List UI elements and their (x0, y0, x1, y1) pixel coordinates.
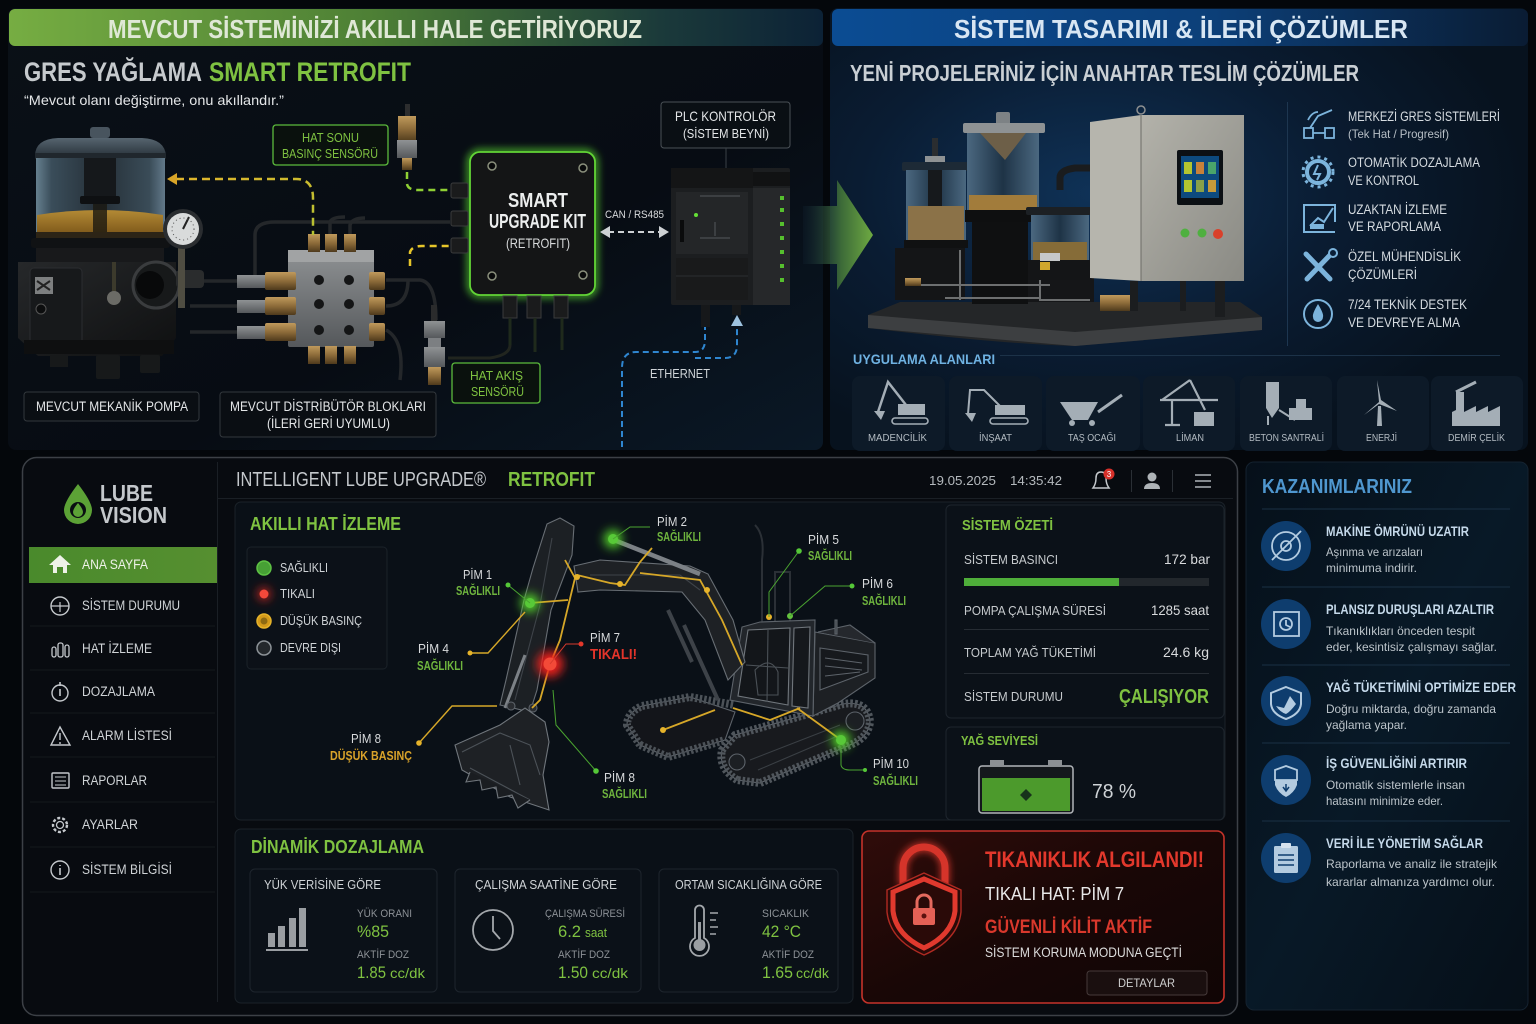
icon: distributor block (237, 234, 385, 364)
arrow: flow dashed line to kit (410, 246, 450, 266)
label: plc controller: PLC KONTROLÖR (675, 107, 776, 124)
benefit: grease consumption (1261, 676, 1516, 732)
panel: smart line monitoring: AKILLI HAT İZLEME (250, 514, 401, 534)
grease lines on excavator (530, 548, 841, 740)
top bar: INTELLIGENT LUBE UPGRADE® (236, 469, 486, 491)
application card: mining (852, 376, 945, 451)
pin 8 low pressure marker: PİM 8 (351, 732, 381, 746)
exhaust and rear mast (755, 525, 790, 622)
menu item: settings: AYARLAR (82, 817, 138, 832)
application card: construction (949, 376, 1042, 451)
icon: mechanical pump (18, 127, 204, 379)
feature: custom engineering (1306, 249, 1461, 282)
smart upgrade kit: (RETROFIT) (506, 235, 570, 251)
menu item: settings (53, 817, 138, 832)
pin markers (574, 574, 793, 733)
pin 6 marker: SAĞLIKLI (862, 593, 906, 608)
card: load: YÜK ORANI (357, 908, 412, 920)
pin 7 alarm marker: PİM 7 (590, 631, 620, 645)
panel: system summary: SİSTEM ÖZETİ (962, 517, 1053, 534)
feature: automatic dosing: VE KONTROL (1348, 173, 1419, 188)
stat: state: SİSTEM DURUMU (964, 689, 1063, 704)
benefit: work safety: İŞ GÜVENLİĞİNİ ARTIRIR (1326, 754, 1467, 771)
benefit: work safety: hatasını minimize eder. (1326, 794, 1443, 808)
benefit: unplanned downtime (1261, 599, 1497, 654)
pin 2 marker: SAĞLIKLI (657, 529, 701, 544)
pin 2 marker: PİM 2 (657, 515, 687, 529)
card: load: YÜK VERİSİNE GÖRE (264, 877, 381, 892)
menu item: system status (51, 597, 180, 615)
label: flow sensor connection (448, 345, 510, 358)
cabin (730, 620, 815, 716)
card: running hours (455, 869, 641, 992)
benefit: grease consumption: yağlama yapar. (1326, 718, 1407, 732)
card: load: %85 (357, 922, 389, 941)
card: ambient temperature: SICAKLIK (762, 908, 810, 920)
panel: dashboard (22, 458, 1238, 1016)
stat: state: ÇALIŞIYOR (1119, 686, 1209, 708)
application card: energy (1337, 376, 1429, 451)
label: flow sensor: HAT AKIŞ (470, 368, 523, 383)
feature: central grease systems: (Tek Hat / Progresif) (1348, 127, 1449, 141)
label: plc controller: (SİSTEM BEYNİ) (683, 126, 769, 141)
legend: SAĞLIKLI (280, 560, 328, 575)
stick (500, 518, 574, 712)
card: load (250, 869, 437, 992)
menu item: system info (51, 861, 172, 879)
icon: thermometer (690, 906, 718, 956)
menu item: line monitoring (52, 641, 152, 657)
panel: oil level: YAĞ SEVİYESİ (961, 733, 1038, 748)
arrow: can bus two-way (600, 226, 669, 238)
card: running hours: 1.50 (558, 963, 588, 982)
benefit: unplanned downtime: eder, kesintisiz çalışmayı sağlar. (1326, 640, 1497, 654)
panel: system design (803, 8, 1528, 451)
menu item: system info: SİSTEM BİLGİSİ (82, 862, 172, 877)
benefit: grease consumption: Doğru miktarda, doğru zamanda (1326, 702, 1496, 716)
label: plc controller (661, 102, 790, 148)
pin 5 marker: SAĞLIKLI (808, 548, 852, 563)
label: existing distributor blocks: (İLERİ GERİ UYUMLU) (267, 416, 390, 431)
benefit: data management: VERİ İLE YÖNETİM SAĞLAR (1326, 834, 1483, 851)
panel: smart retrofit (8, 8, 823, 450)
button: details: DETAYLAR (1118, 976, 1175, 990)
icon: bell: 3 (1107, 470, 1112, 479)
stat: consumption (964, 644, 1209, 660)
benefit: unplanned downtime: Tıkanıklıkları önceden tespit (1326, 624, 1476, 638)
stat: consumption: 24.6 kg (1163, 644, 1209, 660)
pin 4 marker (417, 612, 525, 673)
feature: technical support (1304, 297, 1467, 330)
label: line-end pressure sensor: BASINÇ SENSÖRÜ (282, 146, 378, 161)
header bar: system design: SİSTEM TASARIMI & İLERİ ÇÖZÜMLER (954, 14, 1408, 44)
button: details (1087, 971, 1207, 995)
benefit: data management (1261, 833, 1498, 889)
card: ambient temperature: ORTAM SICAKLIĞINA GÖRE (675, 877, 822, 892)
card: load: cc/dk (390, 965, 426, 981)
panel: dynamic dosing: DİNAMİK DOZAJLAMA (251, 837, 424, 857)
icon: line-end pressure sensor (397, 104, 417, 170)
panel: system summary (946, 505, 1224, 718)
card: running hours: ÇALIŞMA SAATİNE GÖRE (475, 877, 617, 892)
application card: steel: DEMİR ÇELİK (1448, 431, 1505, 444)
application card: construction: İNŞAAT (979, 431, 1013, 444)
menu item: alarm list: ALARM LİSTESİ (82, 728, 172, 743)
panel: benefits (1246, 462, 1528, 1010)
label: line-end pressure sensor (273, 125, 388, 165)
panel: blockage alarm: TIKALI HAT: PİM 7 (985, 884, 1124, 904)
application card: mining: MADENCİLİK (868, 431, 927, 444)
legend: DEVRE DIŞI (280, 641, 341, 655)
header bar: retrofit (9, 9, 823, 46)
label: existing pump (24, 392, 199, 421)
menu item: home (29, 547, 217, 583)
label: flow sensor: SENSÖRÜ (471, 384, 524, 399)
pin 1 marker: SAĞLIKLI (456, 583, 500, 598)
feature: technical support: VE DEVREYE ALMA (1348, 315, 1460, 330)
pin 4 marker: SAĞLIKLI (417, 658, 463, 673)
pin 8 healthy marker (553, 690, 647, 801)
label: flow sensor (452, 363, 540, 403)
benefit: work safety: Otomatik sistemlerle insan (1326, 778, 1465, 792)
stat: runtime: POMPA ÇALIŞMA SÜRESİ (964, 603, 1106, 618)
smart upgrade kit: UPGRADE KIT (489, 211, 586, 233)
feature: custom engineering: ÖZEL MÜHENDİSLİK (1348, 249, 1461, 264)
top bar: 14:35:42 (1010, 473, 1062, 488)
logo: LUBE (100, 480, 153, 506)
application card: steel (1431, 376, 1523, 451)
heading: gres yağlama smart retrofit: SMART RETROFIT (209, 57, 411, 87)
feature: central grease systems: MERKEZİ GRES SİSTEMLERİ (1348, 109, 1500, 124)
benefit: machine life: Aşınma ve arızaları (1326, 545, 1423, 559)
panel: blockage alarm: TIKANIKLIK ALGILANDI! (985, 847, 1204, 872)
application card: quarry (1046, 376, 1140, 451)
stat: consumption: TOPLAM YAĞ TÜKETİMİ (964, 645, 1096, 660)
tank centre (963, 112, 1045, 222)
quote: “Mevcut olanı değiştirme, onu akıllandır.” (24, 92, 284, 108)
feature: custom engineering: ÇÖZÜMLERİ (1348, 267, 1417, 282)
heading: application areas: UYGULAMA ALANLARI (853, 351, 995, 367)
pin 6 marker (790, 577, 906, 616)
benefit: work safety (1261, 754, 1467, 808)
smart upgrade kit: SMART (508, 190, 568, 212)
stat: runtime (964, 602, 1209, 618)
tank right (1026, 207, 1092, 280)
feature: technical support: 7/24 TEKNİK DESTEK (1348, 297, 1467, 312)
icon: bars (266, 908, 308, 951)
feature: automatic dosing (1303, 155, 1480, 188)
stat: pressure (964, 551, 1210, 586)
pin 7 alarm marker: TIKALI! (590, 646, 637, 663)
pin 10 marker: SAĞLIKLI (873, 773, 918, 788)
benefit: machine life: minimuma indirir. (1326, 561, 1417, 575)
sidebar (29, 462, 218, 1002)
heading: gres yağlama smart retrofit: GRES YAĞLAMA (24, 56, 202, 87)
panel: dynamic dosing (235, 829, 853, 1003)
menu item: dosing: DOZAJLAMA (82, 684, 155, 699)
panel: blockage alarm: GÜVENLİ KİLİT AKTİF (985, 917, 1152, 938)
menu item: reports (52, 773, 147, 788)
icon: user (1144, 472, 1160, 489)
icon: menu (1195, 475, 1211, 487)
label: existing pump: MEVCUT MEKANİK POMPA (36, 399, 188, 414)
card: ambient temperature: 1.65 (762, 963, 793, 982)
card: running hours: AKTİF DOZ (558, 948, 610, 961)
panel: blockage alarm (862, 831, 1224, 1003)
card: ambient temperature: cc/dk (796, 965, 830, 981)
feature: remote monitoring (1304, 202, 1447, 234)
icon: line flow sensor (424, 305, 445, 385)
pin 5 marker (769, 533, 852, 617)
pin 8 healthy marker: PİM 8 (604, 771, 635, 785)
heading: turnkey solutions: YENİ PROJELERİNİZ İÇİN ANAHTAR TESLİM ÇÖZÜMLER (850, 60, 1359, 86)
menu item: reports: RAPORLAR (82, 773, 147, 788)
legend: DÜŞÜK BASINÇ (280, 614, 362, 628)
bucket (455, 708, 549, 810)
pin 1 marker: PİM 1 (463, 568, 492, 582)
top bar: RETROFIT (508, 469, 595, 491)
arrow: pressure sensor dashed line (407, 172, 450, 190)
legend: TIKALI (280, 587, 315, 601)
arrow: level dashed line to pump (167, 173, 313, 235)
icon: plc device (671, 168, 790, 327)
menu item: home: ANA SAYFA (82, 557, 148, 572)
icon: bell (1093, 468, 1114, 488)
application card: port (1143, 376, 1235, 451)
card: ambient temperature: 42 °C (762, 922, 801, 941)
pin 10 marker: PİM 10 (873, 757, 909, 771)
feature: remote monitoring: VE RAPORLAMA (1348, 219, 1441, 234)
icon: clock (473, 910, 513, 950)
big arrow between panels (803, 180, 873, 290)
feature: automatic dosing: OTOMATİK DOZAJLAMA (1348, 155, 1480, 170)
top bar (218, 468, 1233, 499)
arrow: ethernet (622, 315, 743, 447)
tank left (902, 138, 968, 248)
label: ethernet: ETHERNET (650, 366, 710, 381)
pin 8 low pressure marker (330, 706, 497, 763)
pin 2 marker (604, 515, 701, 548)
panel: smart line monitoring (235, 502, 1225, 820)
panel: oil level: 78 % (1092, 781, 1136, 803)
label: existing distributor blocks: MEVCUT DİSTRİBÜTÖR BLOKLARI (230, 399, 426, 414)
icon: hoses (190, 217, 450, 380)
icon: shield lock (887, 847, 961, 955)
legend (247, 547, 387, 669)
benefit: unplanned downtime: PLANSIZ DURUŞLARI AZALTIR (1326, 601, 1494, 617)
pin 4 marker: PİM 4 (418, 642, 449, 656)
logo: VISION (100, 502, 167, 528)
benefit: data management: kararlar almanıza yardımcı olur. (1326, 875, 1495, 889)
label: line-end pressure sensor: HAT SONU (302, 130, 359, 145)
card: ambient temperature: AKTİF DOZ (762, 948, 814, 961)
logo (64, 480, 167, 528)
benefit: data management: Raporlama ve analiz ile stratejik (1326, 857, 1498, 871)
icon: skid machine (868, 106, 1262, 346)
excavator (455, 518, 875, 810)
card: load: 1.85 (357, 963, 386, 982)
body (813, 632, 875, 716)
menu item: system status: SİSTEM DURUMU (82, 598, 180, 613)
application card: concrete plant: BETON SANTRALİ (1249, 431, 1324, 444)
rear track (627, 697, 735, 757)
card: running hours: cc/dk (592, 965, 629, 981)
panel: benefits: KAZANIMLARINIZ (1262, 476, 1412, 498)
pin 5 marker: PİM 5 (808, 533, 839, 547)
stat: pressure: SİSTEM BASINCI (964, 552, 1058, 567)
feature: central grease systems (1304, 109, 1500, 141)
benefit: machine life: MAKİNE ÖMRÜNÜ UZATIR (1326, 523, 1469, 539)
front track (721, 703, 870, 783)
pin 6 marker: PİM 6 (862, 577, 893, 591)
pin 10 marker (832, 731, 918, 788)
benefit: machine life (1261, 521, 1469, 575)
menu item: dosing (52, 682, 155, 701)
pin 8 healthy marker: SAĞLIKLI (602, 786, 647, 801)
menu item: alarm list (51, 727, 172, 745)
application card: port: LİMAN (1176, 431, 1204, 444)
card: running hours: ÇALIŞMA SÜRESİ (545, 907, 625, 920)
application card: quarry: TAŞ OCAĞI (1068, 431, 1116, 444)
label: can rs485: CAN / RS485 (605, 209, 664, 221)
smart upgrade kit (451, 152, 595, 352)
pin 8 low pressure marker: DÜŞÜK BASINÇ (330, 748, 412, 763)
boom (574, 560, 745, 680)
stat: runtime: 1285 saat (1151, 602, 1209, 618)
pin 7 alarm marker (537, 631, 637, 677)
card: running hours: saat (585, 925, 607, 940)
heading: gres yağlama smart retrofit (24, 56, 411, 87)
stat: state (964, 686, 1209, 708)
header bar: retrofit: MEVCUT SİSTEMİNİZİ AKILLI HALE GETİRİYORUZ (108, 14, 642, 44)
card: load: AKTİF DOZ (357, 948, 409, 961)
application card: concrete plant (1240, 376, 1332, 451)
panel: blockage alarm: SİSTEM KORUMA MODUNA GEÇTİ (985, 943, 1182, 960)
stat: pressure: 172 bar (1164, 551, 1210, 567)
pipes (905, 250, 1090, 300)
card: ambient temperature (659, 869, 838, 992)
menu item: line monitoring: HAT İZLEME (82, 641, 152, 656)
cabinet (1090, 106, 1244, 317)
panel: oil level (946, 727, 1224, 820)
card: running hours: 6.2 (558, 922, 581, 941)
feature: remote monitoring: UZAKTAN İZLEME (1348, 202, 1447, 217)
pin 1 marker (456, 568, 539, 612)
application card: energy: ENERJİ (1366, 431, 1397, 444)
header bar: system design (832, 9, 1528, 46)
top bar: 19.05.2025 (929, 473, 996, 488)
label: existing distributor blocks (220, 392, 436, 437)
